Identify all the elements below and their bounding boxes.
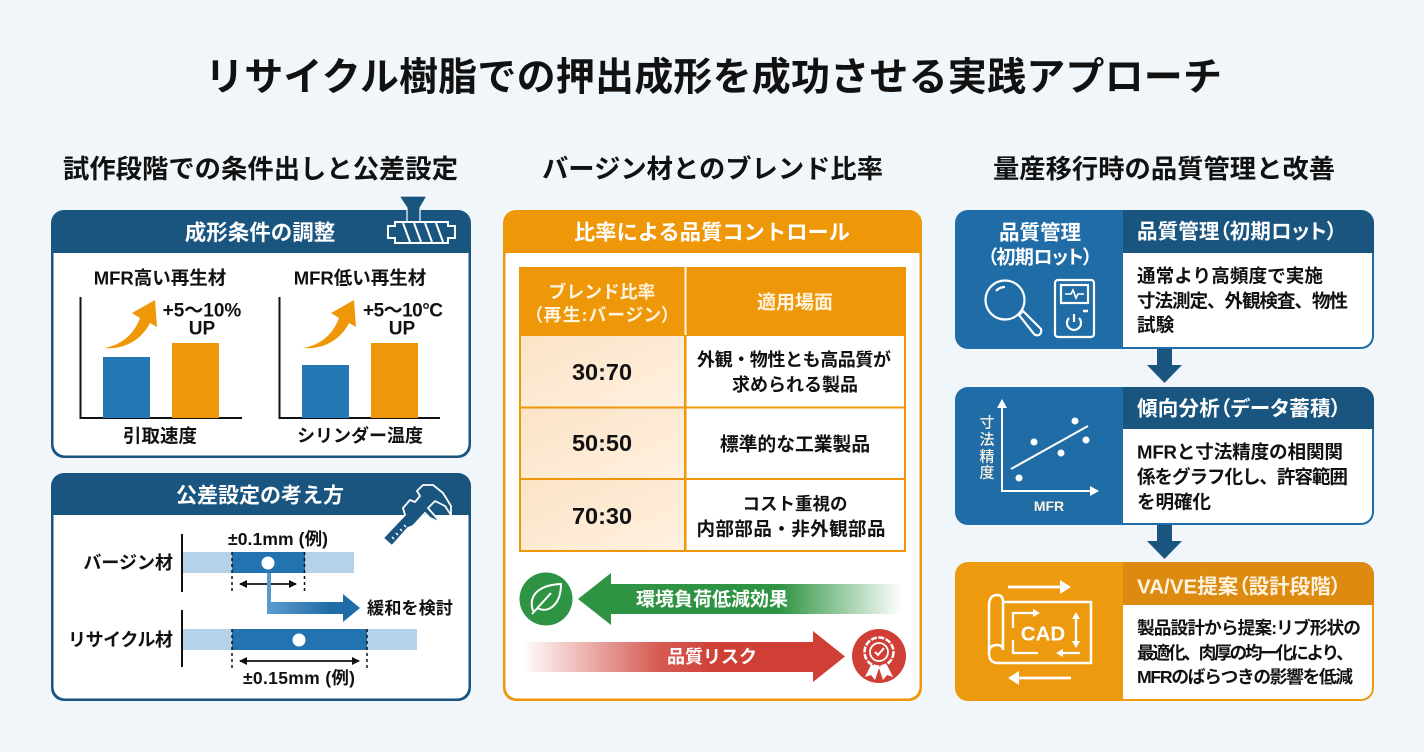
panel: ratio quality control bbox=[503, 210, 922, 701]
axis label: y: 度 bbox=[979, 464, 995, 482]
heading: mass production: 量産移行時の品質管理と改善 bbox=[993, 154, 1335, 184]
label: CAD: CAD bbox=[1021, 622, 1065, 646]
axis label: y: 寸 bbox=[979, 414, 995, 432]
row text: 70:30: コスト重視の bbox=[742, 494, 848, 514]
arrow: down 1 bbox=[1147, 349, 1182, 383]
icon: magnifier bbox=[986, 280, 1041, 335]
arrow: environmental benefit bbox=[578, 573, 902, 625]
row: 30:70: 30:70 bbox=[572, 359, 632, 385]
text: initial lot: 試験 bbox=[1137, 314, 1175, 336]
row text: 70:30 bbox=[696, 494, 886, 540]
value: 0.15mm: ±0.15mm (例) bbox=[243, 668, 355, 688]
axis label: take-off speed: 引取速度 bbox=[123, 426, 197, 446]
icon: extruder bbox=[388, 196, 455, 243]
label: recycled: リサイクル材 bbox=[68, 630, 173, 650]
axis label: y: 法 bbox=[979, 432, 995, 448]
row: virgin material bbox=[83, 529, 354, 592]
label: low MFR: MFR低い再生材 bbox=[294, 268, 426, 288]
table header: scene: 適用場面 bbox=[757, 292, 833, 314]
text: initial lot: 通常より高頻度で実施 bbox=[1137, 266, 1323, 286]
row: 70:30: 70:30 bbox=[572, 503, 632, 529]
heading: blend ratio: バージン材とのブレンド比率 bbox=[542, 154, 883, 184]
label: high MFR: MFR高い再生材 bbox=[94, 268, 226, 288]
icon: caliper bbox=[383, 485, 451, 546]
chart: cylinder temperature: UP bbox=[389, 318, 416, 340]
table header: ratio: （再生:バージン） bbox=[534, 305, 670, 325]
text: initial lot bbox=[1137, 266, 1348, 336]
title: リサイクル樹脂での押出成形を成功させる実践アプローチ bbox=[205, 56, 1222, 100]
left title: 品質管理 bbox=[999, 222, 1081, 244]
row text: 30:70 bbox=[697, 349, 891, 395]
label: environmental benefit: 環境負荷低減効果 bbox=[636, 588, 788, 610]
arrow: increase bbox=[303, 300, 356, 348]
icon: quality badge bbox=[852, 629, 906, 683]
row text: 30:70: 外観・物性とも高品質が bbox=[697, 349, 891, 370]
label: quality risk: 品質リスク bbox=[667, 647, 757, 667]
arrow: increase bbox=[104, 300, 157, 348]
chart: take-off speed: UP bbox=[189, 318, 216, 340]
label: consider relaxing: 緩和を検討 bbox=[367, 598, 453, 618]
value: temperature increase: +5〜10°C bbox=[363, 300, 443, 322]
axis label: cylinder temperature: シリンダー温度 bbox=[297, 425, 423, 446]
axis label: x: MFR bbox=[1034, 498, 1064, 514]
axis label: y: 精 bbox=[979, 448, 995, 466]
panel: tolerance setting bbox=[51, 473, 471, 701]
heading: ratio control: 比率による品質コントロール bbox=[574, 220, 850, 244]
arrow: consider relaxing bbox=[267, 573, 360, 622]
icon: tester device bbox=[1055, 280, 1094, 337]
row text: 70:30: 内部部品・非外観部品 bbox=[696, 518, 886, 540]
text: trend analysis bbox=[1137, 442, 1348, 512]
chart: take-off speed bbox=[80, 268, 242, 446]
text: initial lot: 寸法測定、外観検査、物性 bbox=[1137, 290, 1348, 312]
row: 50:50: 50:50 bbox=[572, 430, 632, 456]
label: virgin: バージン材 bbox=[83, 553, 173, 573]
value: speed increase: +5〜10% bbox=[163, 300, 241, 322]
arrow: down 2 bbox=[1147, 525, 1182, 559]
arrow: quality risk bbox=[522, 631, 845, 682]
left title: （初期ロット） bbox=[988, 246, 1092, 268]
panel: molding condition adjustment bbox=[51, 196, 471, 458]
panel: initial lot quality control bbox=[955, 210, 1374, 349]
heading: trend analysis: 傾向分析（データ蓄積） bbox=[1137, 396, 1341, 420]
row text: 50:50: 標準的な工業製品 bbox=[720, 434, 870, 454]
row: recycled material bbox=[68, 610, 417, 688]
panel: VA/VE proposal bbox=[955, 562, 1374, 701]
left title bbox=[988, 222, 1092, 268]
chart: cylinder temperature bbox=[280, 268, 443, 446]
text: VA/VE: 製品設計から提案:リブ形状の bbox=[1137, 617, 1361, 638]
row text: 30:70: 求められる製品 bbox=[732, 374, 858, 395]
value: 0.1mm: ±0.1mm (例) bbox=[228, 529, 328, 549]
heading: initial lot: 品質管理（初期ロット） bbox=[1137, 220, 1337, 244]
panel: trend analysis bbox=[955, 387, 1374, 525]
icon: leaf bbox=[520, 572, 572, 626]
table header: ratio: ブレンド比率 bbox=[549, 281, 655, 302]
text: trend analysis: を明確化 bbox=[1137, 492, 1211, 512]
axis label: y bbox=[979, 414, 995, 482]
text: VA/VE bbox=[1137, 617, 1361, 687]
text: VA/VE: 最適化、肉厚の均一化により、 bbox=[1137, 643, 1354, 663]
text: trend analysis: MFRと寸法精度の相関関 bbox=[1137, 442, 1343, 462]
heading: molding conditions: 成形条件の調整 bbox=[185, 221, 335, 245]
heading: trial stage: 試作段階での条件出しと公差設定 bbox=[63, 154, 458, 184]
chart: scatter bbox=[979, 399, 1099, 514]
table header: ratio bbox=[534, 281, 670, 325]
text: trend analysis: 係をグラフ化し、許容範囲 bbox=[1137, 466, 1348, 488]
heading: tolerance: 公差設定の考え方 bbox=[176, 484, 344, 508]
text: VA/VE: MFRのばらつきの影響を低減 bbox=[1137, 666, 1353, 687]
heading: VA/VE: VA/VE提案（設計段階） bbox=[1137, 576, 1341, 598]
icon: CAD blueprint bbox=[989, 580, 1091, 685]
table: blend ratios bbox=[519, 267, 906, 552]
